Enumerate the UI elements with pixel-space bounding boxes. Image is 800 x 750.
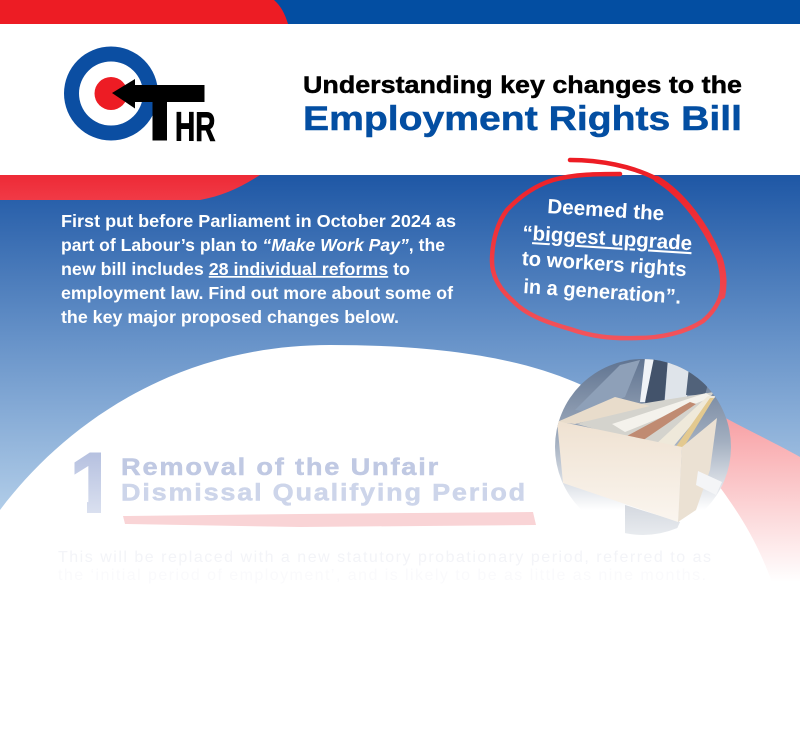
quote text: to workers rights [521, 247, 687, 281]
cardboard box side [678, 418, 717, 522]
red corner under header [0, 175, 260, 200]
infographic canvas [0, 0, 800, 568]
logo arrow and T [112, 79, 204, 140]
top colour bar [0, 0, 800, 24]
logo roundel [64, 46, 158, 140]
thick part of ring [657, 179, 723, 296]
red brush underline [123, 512, 536, 527]
intro text: First put before Parliament in October 2024 as [61, 211, 456, 231]
cardboard box front [557, 421, 682, 522]
section 1 heading: Removal of the Unfair [121, 454, 440, 481]
title [303, 72, 742, 138]
red crescent at right [690, 398, 800, 600]
intro text: new bill includes 28 individual reforms to [61, 259, 410, 279]
white curved panel [0, 345, 780, 750]
cuff [696, 471, 722, 495]
intro text: employment law. Find out more about some of [61, 283, 453, 303]
shirt highlights [575, 360, 640, 412]
quote text: in a generation”. [523, 275, 682, 309]
cardboard box back [557, 397, 650, 424]
logo HR letters: HR [175, 104, 216, 150]
box contents [577, 392, 714, 447]
sleeve [625, 505, 680, 535]
logo [64, 46, 216, 150]
section 1 body text fading out: This will be replaced with a new statutory probationary period, referred to as [58, 549, 711, 566]
section 1 number: 1 [70, 436, 117, 530]
section 1 heading: Dismissal Qualifying Period [121, 480, 527, 506]
gradient blue background [0, 175, 800, 600]
quote text [521, 195, 693, 309]
callout: hand drawn circle quote [492, 160, 723, 338]
quote text: “biggest upgrade [522, 222, 693, 255]
section 1 body text fading out: the ‘initial period of employment’, and is likely to be as little as nine months. [58, 567, 706, 584]
title: Understanding key changes to the [303, 72, 742, 99]
intro text: the key major proposed changes below. [61, 307, 399, 327]
intro text [61, 211, 456, 327]
title: Employment Rights Bill [303, 100, 742, 138]
white header band [0, 24, 800, 175]
red hand-drawn ring [492, 160, 723, 338]
section 1 heading [121, 454, 527, 506]
intro text: part of Labour’s plan to “Make Work Pay”, the [61, 235, 445, 255]
photo: box of office belongings [555, 359, 731, 535]
quote text: Deemed the [547, 195, 665, 225]
section 1 body text fading out [58, 549, 711, 584]
